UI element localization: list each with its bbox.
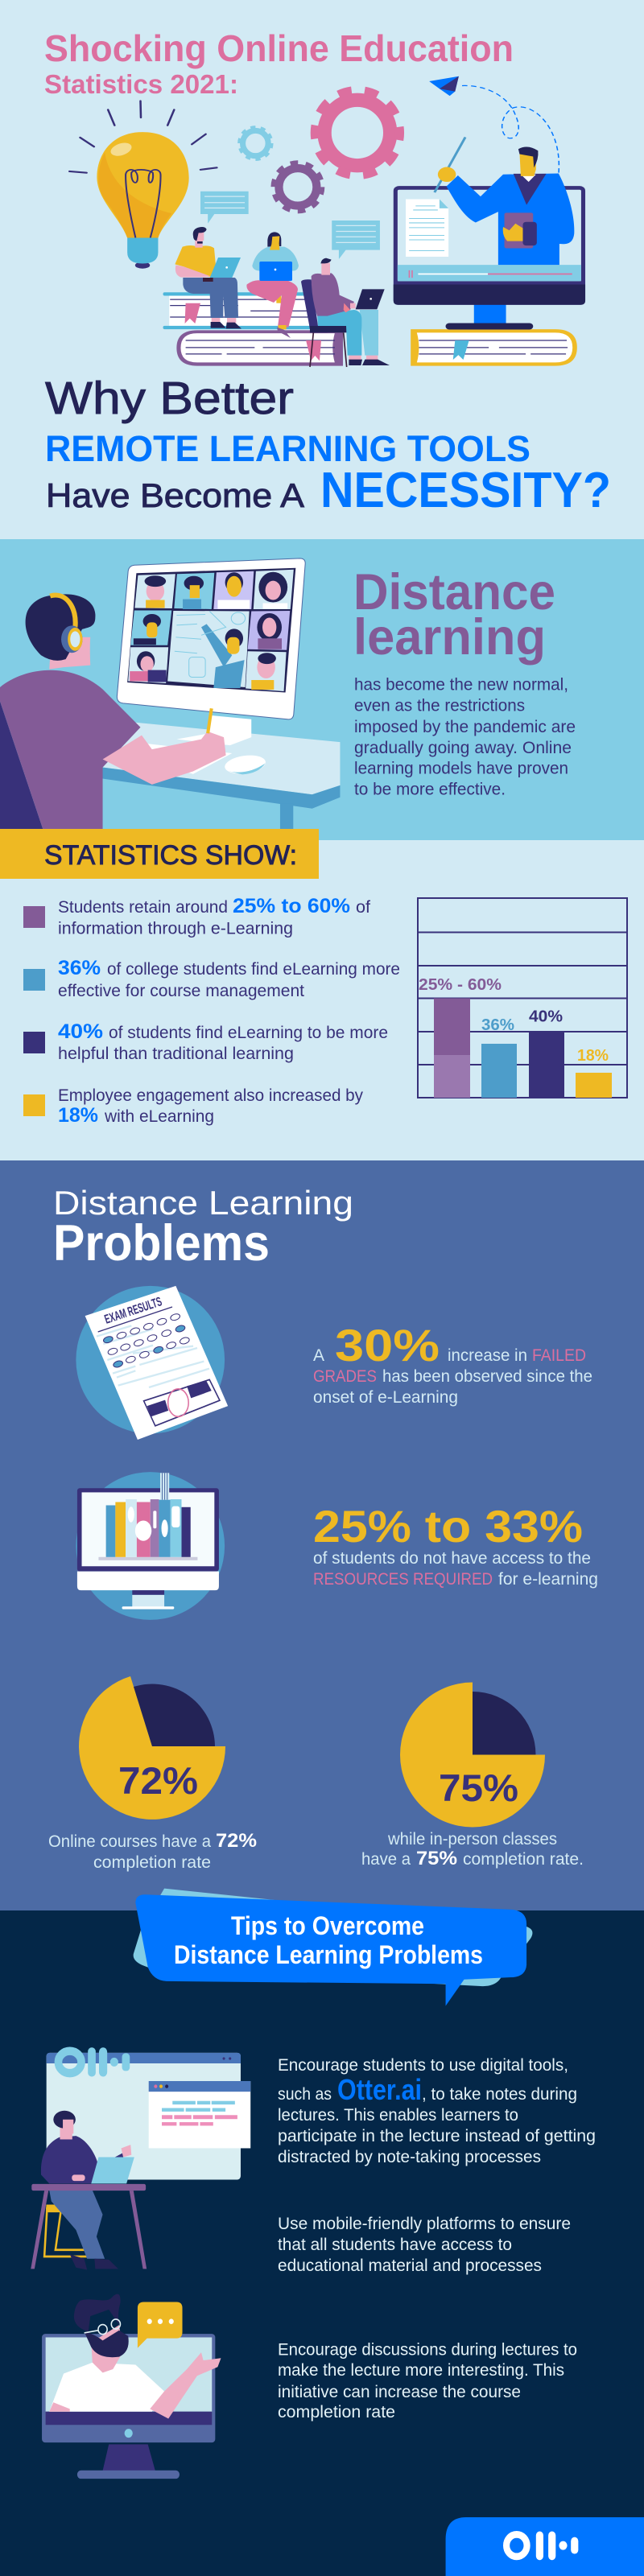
- panel: tips background: [0, 1910, 644, 2576]
- text block: distance learning intro: [354, 676, 576, 798]
- icon: book right: [411, 329, 577, 366]
- heading: distance learning: learning: [353, 609, 546, 666]
- caption: in-person classes: completion rate.: [463, 1850, 584, 1869]
- figure: student three with chair: [301, 258, 390, 367]
- heading: why better: [45, 373, 611, 518]
- text block: failed grades: has been observed since the: [382, 1367, 592, 1386]
- illustration: notes at desk: [31, 2047, 250, 2269]
- text block: failed grades: onset of e-Learning: [313, 1388, 458, 1407]
- legend item: course management: [23, 957, 400, 1000]
- text block: resources required: of students do not have access to the: [313, 1549, 591, 1568]
- text block: tip three: [278, 2340, 577, 2421]
- monitor with video call: [117, 558, 305, 745]
- caption: online courses: completion rate: [93, 1853, 211, 1872]
- text block: distance learning intro: learning models have proven: [354, 760, 568, 777]
- bar chart: 40%: [529, 1008, 563, 1025]
- icon: chat bubble: [138, 2302, 183, 2348]
- illustration: three students: [175, 227, 390, 367]
- heading: why better: Why Better: [45, 373, 294, 424]
- icon: teacher on monitor: [394, 137, 585, 330]
- heading: why better: NECESSITY?: [320, 463, 611, 518]
- banner: statistics show: [0, 829, 319, 879]
- text block: distance learning intro: to be more effective.: [354, 781, 506, 798]
- text block: tip one: [278, 2056, 596, 2166]
- text block: tip one: participate in the lecture instead of getting: [278, 2127, 596, 2145]
- legend item: retention: information through e-Learning: [58, 919, 293, 938]
- figure: student: [0, 594, 226, 830]
- panel: distance learning background: [0, 539, 644, 840]
- icon: paper plane: [429, 76, 559, 175]
- text block: failed grades: increase in: [448, 1346, 527, 1365]
- text block: tip one: such as: [278, 2085, 332, 2104]
- text block: tip three: completion rate: [278, 2403, 395, 2421]
- figure: lecturer: [49, 2294, 221, 2419]
- icon: exam results sheet: [76, 1286, 228, 1440]
- speech bubble heading: tips: [134, 1889, 532, 2006]
- icon: book stack left: [163, 292, 343, 366]
- icon: pink gear: [315, 91, 399, 175]
- illustration: student at computer: [0, 558, 340, 830]
- heading: distance learning: Distance: [353, 564, 555, 620]
- pie chart: 75%: 75%: [439, 1766, 518, 1809]
- note panel: [149, 2081, 250, 2148]
- text block: tip three: Encourage discussions during lectures to: [278, 2340, 577, 2360]
- icon: otter logo: [58, 2047, 130, 2077]
- caption: online courses: Online courses have a: [48, 1832, 211, 1851]
- legend item: more helpful: 40%: [58, 1020, 103, 1043]
- legend item: employee engagement: with eLearning: [104, 1107, 214, 1126]
- heading: distance learning problems: Problems: [53, 1215, 270, 1272]
- monitor: [42, 2334, 215, 2479]
- text block: failed grades: GRADES: [313, 1367, 377, 1386]
- legend item: retention: 25% to 60%: [233, 895, 350, 917]
- legend item: course management: of college students find eLearning more: [107, 960, 400, 979]
- title: Shocking Online Education: [44, 27, 514, 69]
- bar chart: 18%: [577, 1047, 609, 1065]
- legend item: course management: effective for course management: [58, 982, 304, 1000]
- text block: tip two: educational material and processes: [278, 2257, 542, 2275]
- caption: online courses: [48, 1830, 257, 1872]
- heading: why better: Have Become A: [46, 476, 304, 514]
- icon: light bulb: [69, 101, 217, 269]
- icon: books on monitor: [76, 1472, 225, 1620]
- text block: resources required: RESOURCES REQUIRED: [313, 1570, 493, 1589]
- icon: speech bubbles: [200, 192, 380, 259]
- figure: student at desk: [31, 2111, 147, 2269]
- heading: distance learning: [353, 564, 555, 666]
- caption: in-person classes: 75%: [416, 1848, 457, 1869]
- caption: in-person classes: while in-person classes: [387, 1830, 557, 1849]
- pie chart: 72%: 72%: [118, 1759, 198, 1802]
- text block: tip two: [278, 2215, 571, 2275]
- speech bubble heading: tips: Distance Learning Problems: [174, 1940, 483, 1969]
- banner: statistics show: STATISTICS SHOW:: [44, 840, 297, 871]
- text block: tip two: Use mobile-friendly platforms to ensure: [278, 2215, 571, 2233]
- icon: blue gear: [239, 127, 271, 159]
- text block: failed grades: A: [313, 1346, 324, 1365]
- text block: tip one: distracted by note-taking processes: [278, 2148, 541, 2166]
- icon: mouse and paper: [144, 744, 266, 776]
- legend item: employee engagement: 18%: [58, 1104, 98, 1127]
- window: [47, 2053, 241, 2179]
- text block: distance learning intro: even as the restrictions: [354, 697, 525, 715]
- legend item: more helpful: of students find eLearning to be more: [109, 1024, 388, 1042]
- text block: resources required: [313, 1501, 598, 1589]
- legend item: employee engagement: [23, 1086, 363, 1127]
- title: Statistics 2021:: [44, 69, 238, 99]
- text block: distance learning intro: gradually going away. Online: [354, 739, 572, 757]
- legend item: employee engagement: Employee engagement also increased by: [58, 1086, 363, 1105]
- text block: failed grades: [313, 1320, 592, 1407]
- text block: distance learning intro: has become the new normal,: [354, 676, 568, 694]
- illustration: lecturer on monitor: [42, 2294, 221, 2479]
- heading: distance learning problems: [53, 1184, 353, 1272]
- text block: resources required: 25% to 33%: [313, 1501, 583, 1552]
- legend item: course management: 36%: [58, 957, 101, 979]
- title: [44, 27, 514, 99]
- bar chart: 25% - 60%: [419, 976, 502, 994]
- legend item: more helpful: [23, 1020, 388, 1063]
- illustration: header scene: [69, 76, 585, 366]
- caption: in-person classes: have a: [361, 1850, 411, 1869]
- figure: student one: [175, 227, 242, 328]
- heading: why better: REMOTE LEARNING TOOLS: [45, 428, 530, 469]
- pie chart: 75%: [400, 1682, 545, 1827]
- panel: statistics background: [0, 840, 644, 1160]
- logo badge: otter: [446, 2517, 644, 2576]
- text block: tip three: make the lecture more interesting. This: [278, 2361, 564, 2380]
- icon: purple gear: [274, 163, 322, 211]
- pie chart: 72%: [79, 1676, 225, 1820]
- text block: failed grades: FAILED: [532, 1346, 586, 1365]
- legend item: more helpful: helpful than traditional learning: [58, 1045, 294, 1063]
- text block: resources required: for e-learning: [498, 1570, 598, 1589]
- text block: tip one: , to take notes during: [422, 2085, 577, 2104]
- caption: in-person classes: [361, 1830, 584, 1869]
- caption: online courses: 72%: [216, 1830, 257, 1852]
- text block: tip three: initiative can increase the course: [278, 2383, 521, 2401]
- text block: tip two: that all students have access to: [278, 2236, 512, 2254]
- figure: student two: [246, 232, 299, 338]
- legend item: retention: Students retain around: [58, 898, 228, 917]
- legend item: retention: of: [356, 898, 370, 917]
- legend item: retention: [23, 895, 370, 938]
- text block: failed grades: 30%: [335, 1320, 440, 1370]
- panel: problems background: [0, 1160, 644, 1910]
- text block: distance learning intro: imposed by the pandemic are: [354, 718, 576, 736]
- text block: tip one: Encourage students to use digital tools,: [278, 2056, 568, 2075]
- panel: header background: [0, 0, 644, 539]
- bar chart: [418, 898, 627, 1098]
- speech bubble heading: tips: Tips to Overcome: [231, 1911, 424, 1940]
- bar chart: 36%: [481, 1016, 514, 1034]
- text: exam results label: EXAM RESULTS: [103, 1295, 164, 1327]
- desk: [102, 723, 340, 830]
- text block: tip one: Otter.ai: [337, 2073, 422, 2106]
- heading: distance learning problems: Distance Learning: [53, 1184, 353, 1222]
- text block: tip one: lectures. This enables learners to: [278, 2106, 518, 2125]
